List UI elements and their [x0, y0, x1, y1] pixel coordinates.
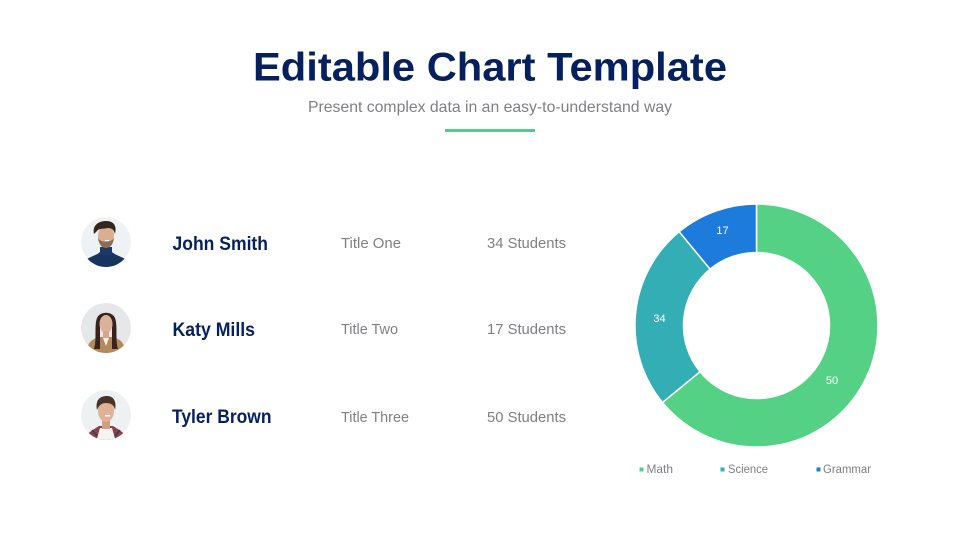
legend item: Math: Math	[646, 464, 673, 476]
job title: Title Two	[341, 321, 398, 338]
legend item: Science: Science	[728, 464, 768, 476]
student count: 34 Students	[487, 235, 566, 252]
student count: 17 Students	[487, 321, 566, 338]
title accent bar	[445, 129, 535, 132]
avatar: John Smith	[81, 217, 131, 268]
segment: Math	[662, 204, 878, 447]
data label: 17: 17	[716, 225, 729, 237]
legend	[640, 464, 871, 476]
avatar: Katy Mills	[81, 303, 131, 353]
data label: 34: 34	[653, 313, 666, 325]
donut chart	[635, 204, 878, 447]
name: John Smith	[172, 234, 268, 255]
subtitle: Present complex data in an easy-to-understand way	[308, 99, 672, 116]
student count: 50 Students	[487, 409, 566, 426]
segment: Grammar	[679, 204, 756, 269]
data label: 50: 50	[826, 375, 838, 387]
job title: Title Three	[341, 409, 409, 426]
title: Editable Chart Template	[253, 46, 727, 90]
row: John Smith	[81, 217, 566, 268]
row: Katy Mills	[81, 303, 566, 353]
segment: Science	[635, 232, 710, 402]
job title: Title One	[341, 235, 401, 252]
row: Tyler Brown	[81, 390, 566, 442]
legend item: Grammar: Grammar	[823, 464, 871, 476]
name: Katy Mills	[172, 320, 255, 341]
avatar: Tyler Brown	[81, 390, 131, 442]
name: Tyler Brown	[172, 407, 272, 428]
